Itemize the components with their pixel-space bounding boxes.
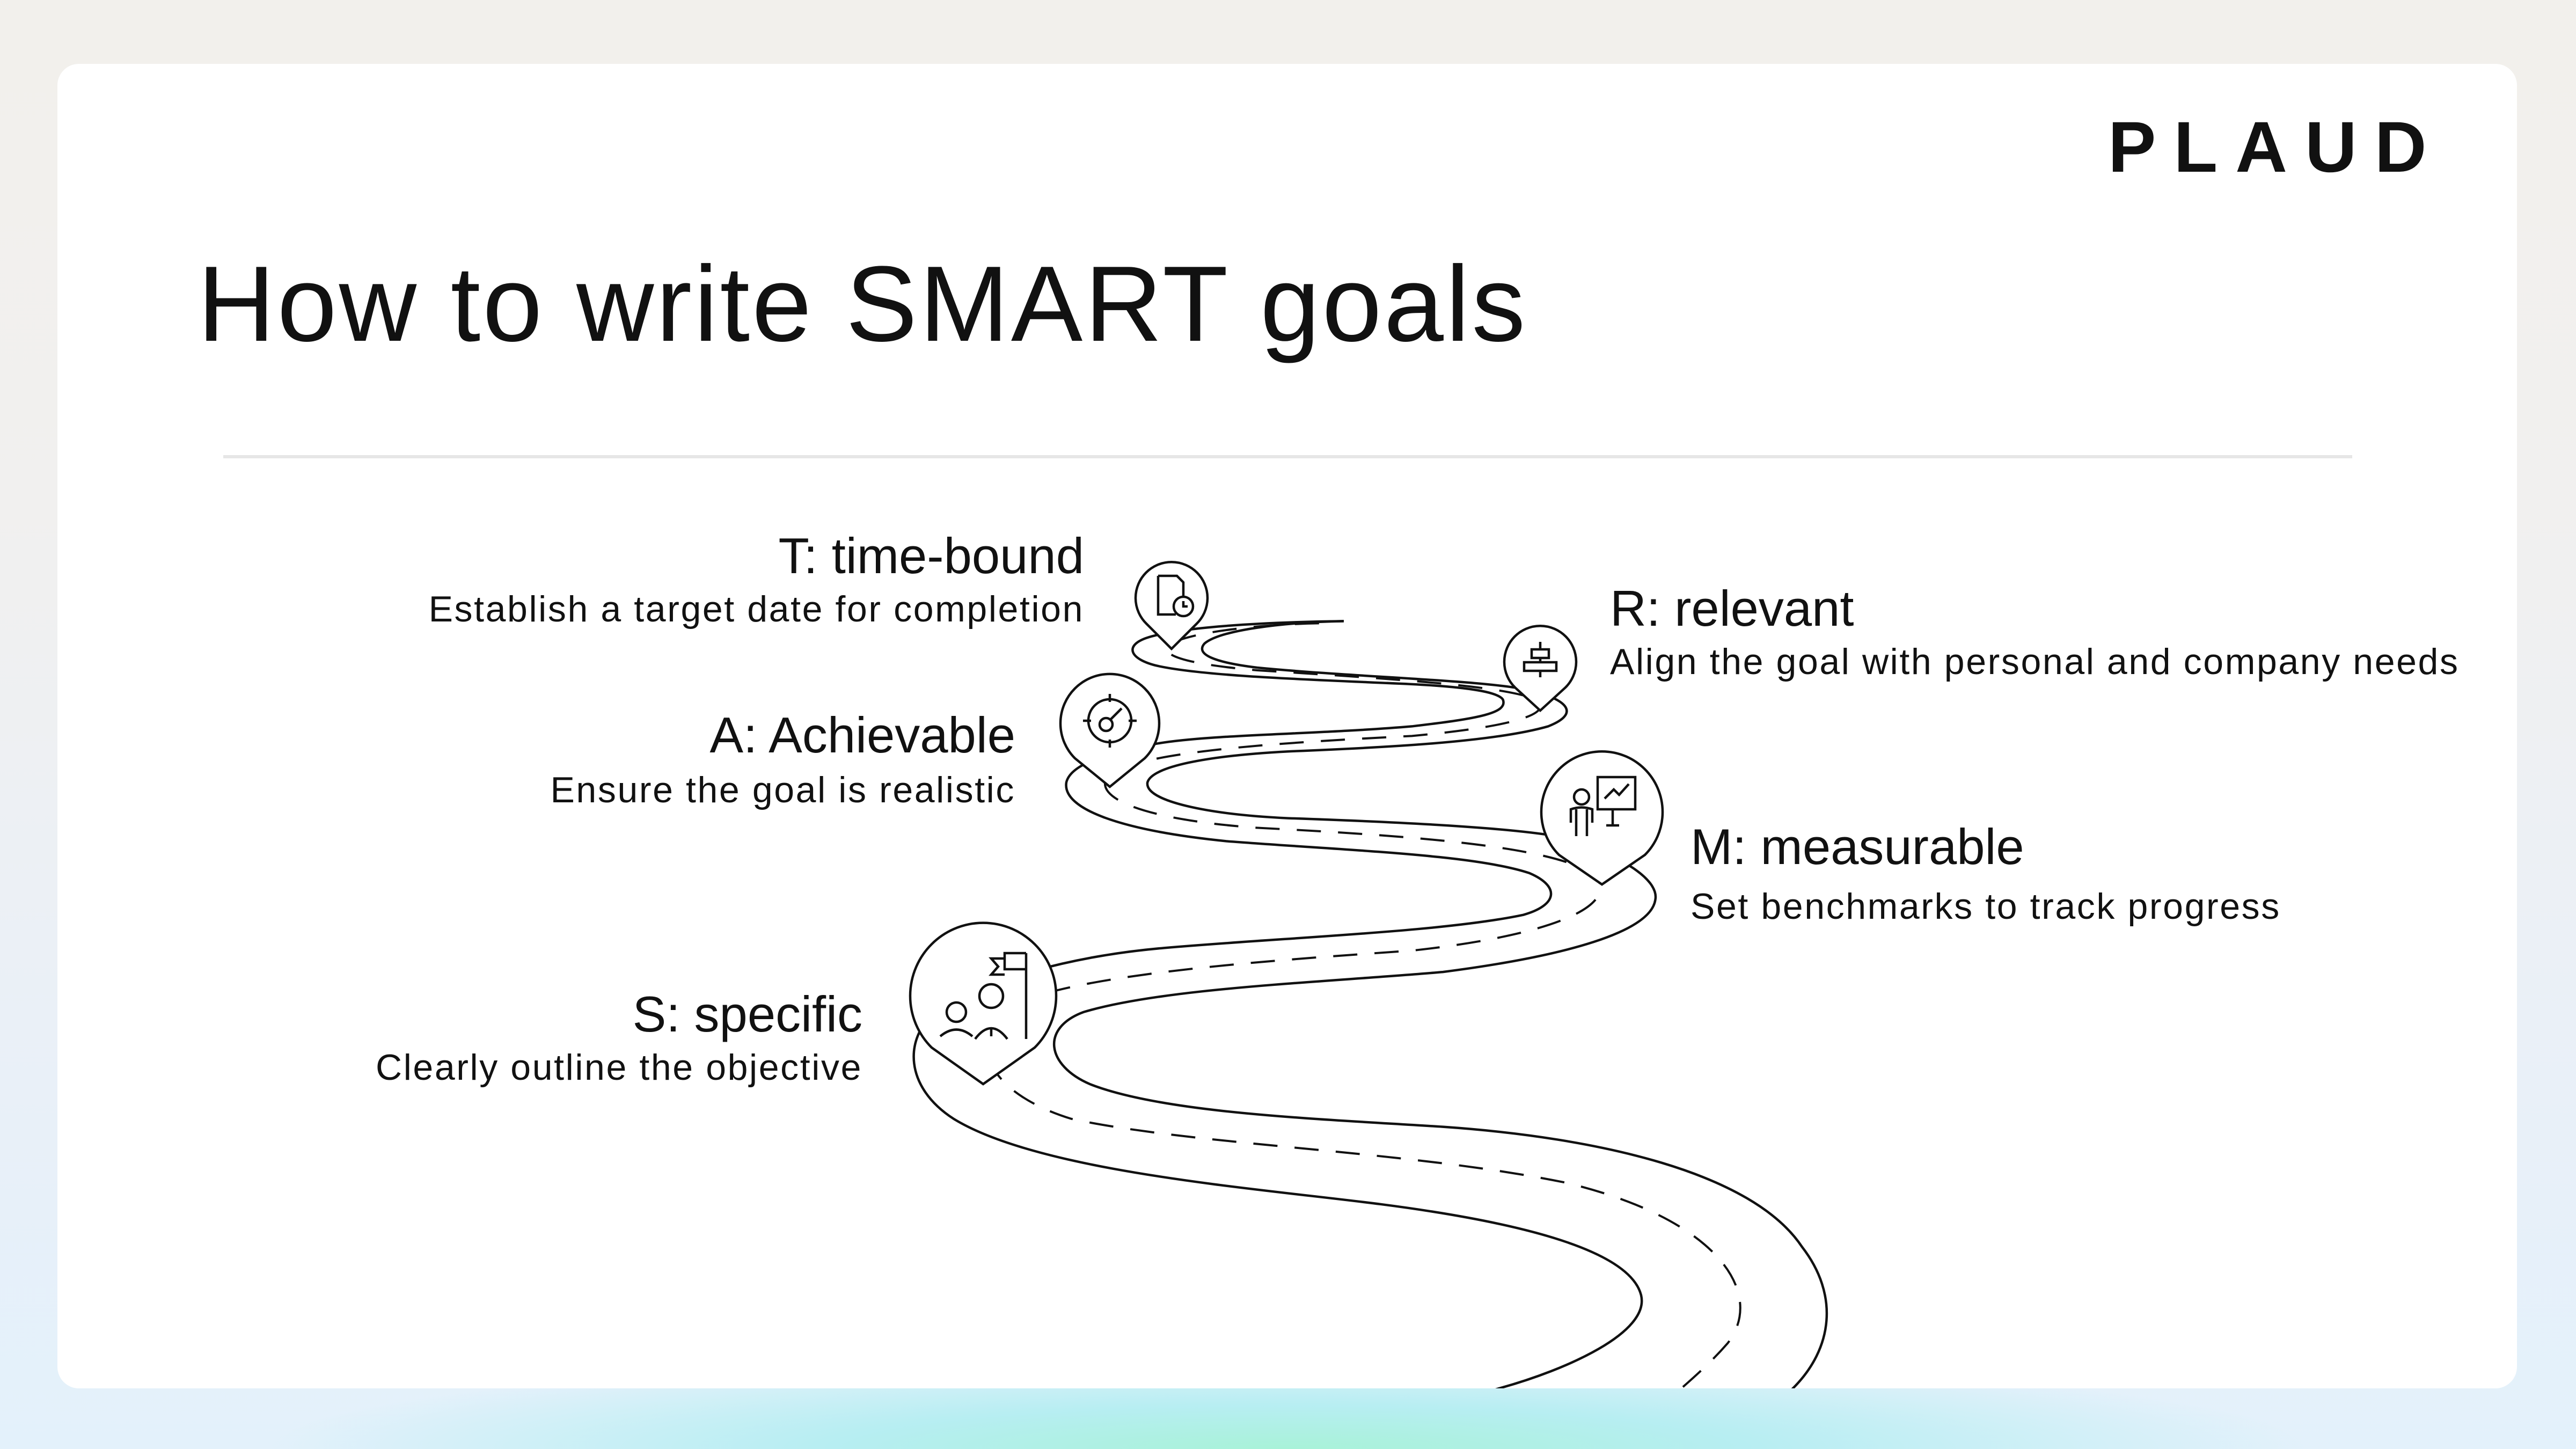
road illustration xyxy=(909,561,1828,1388)
label A xyxy=(550,707,1015,810)
label A: Ensure the goal is realistic xyxy=(550,770,1015,810)
label A: A: Achievable xyxy=(709,707,1015,763)
label M: Set benchmarks to track progress xyxy=(1690,886,2281,927)
pin S: team with flag xyxy=(910,923,1056,1084)
pin A: target dial xyxy=(1060,674,1159,787)
pin T: calendar clock xyxy=(1136,562,1208,649)
label S: Clearly outline the objective xyxy=(376,1047,862,1088)
label R xyxy=(1610,580,2460,682)
label R: R: relevant xyxy=(1610,580,1854,636)
title: How to write SMART goals xyxy=(197,244,1527,364)
label S: S: specific xyxy=(633,986,862,1042)
label T: T: time-bound xyxy=(778,528,1084,584)
label M: M: measurable xyxy=(1690,818,2024,875)
label T: Establish a target date for completion xyxy=(429,589,1084,630)
label T xyxy=(429,528,1084,630)
label S xyxy=(376,986,862,1088)
pin M: presenter with chart xyxy=(1541,751,1663,884)
label M xyxy=(1690,818,2281,927)
logo: PLAUD xyxy=(2108,107,2445,187)
pin R: align icon xyxy=(1504,626,1576,711)
label R: Align the goal with personal and company needs xyxy=(1610,641,2460,682)
road xyxy=(914,621,1827,1413)
